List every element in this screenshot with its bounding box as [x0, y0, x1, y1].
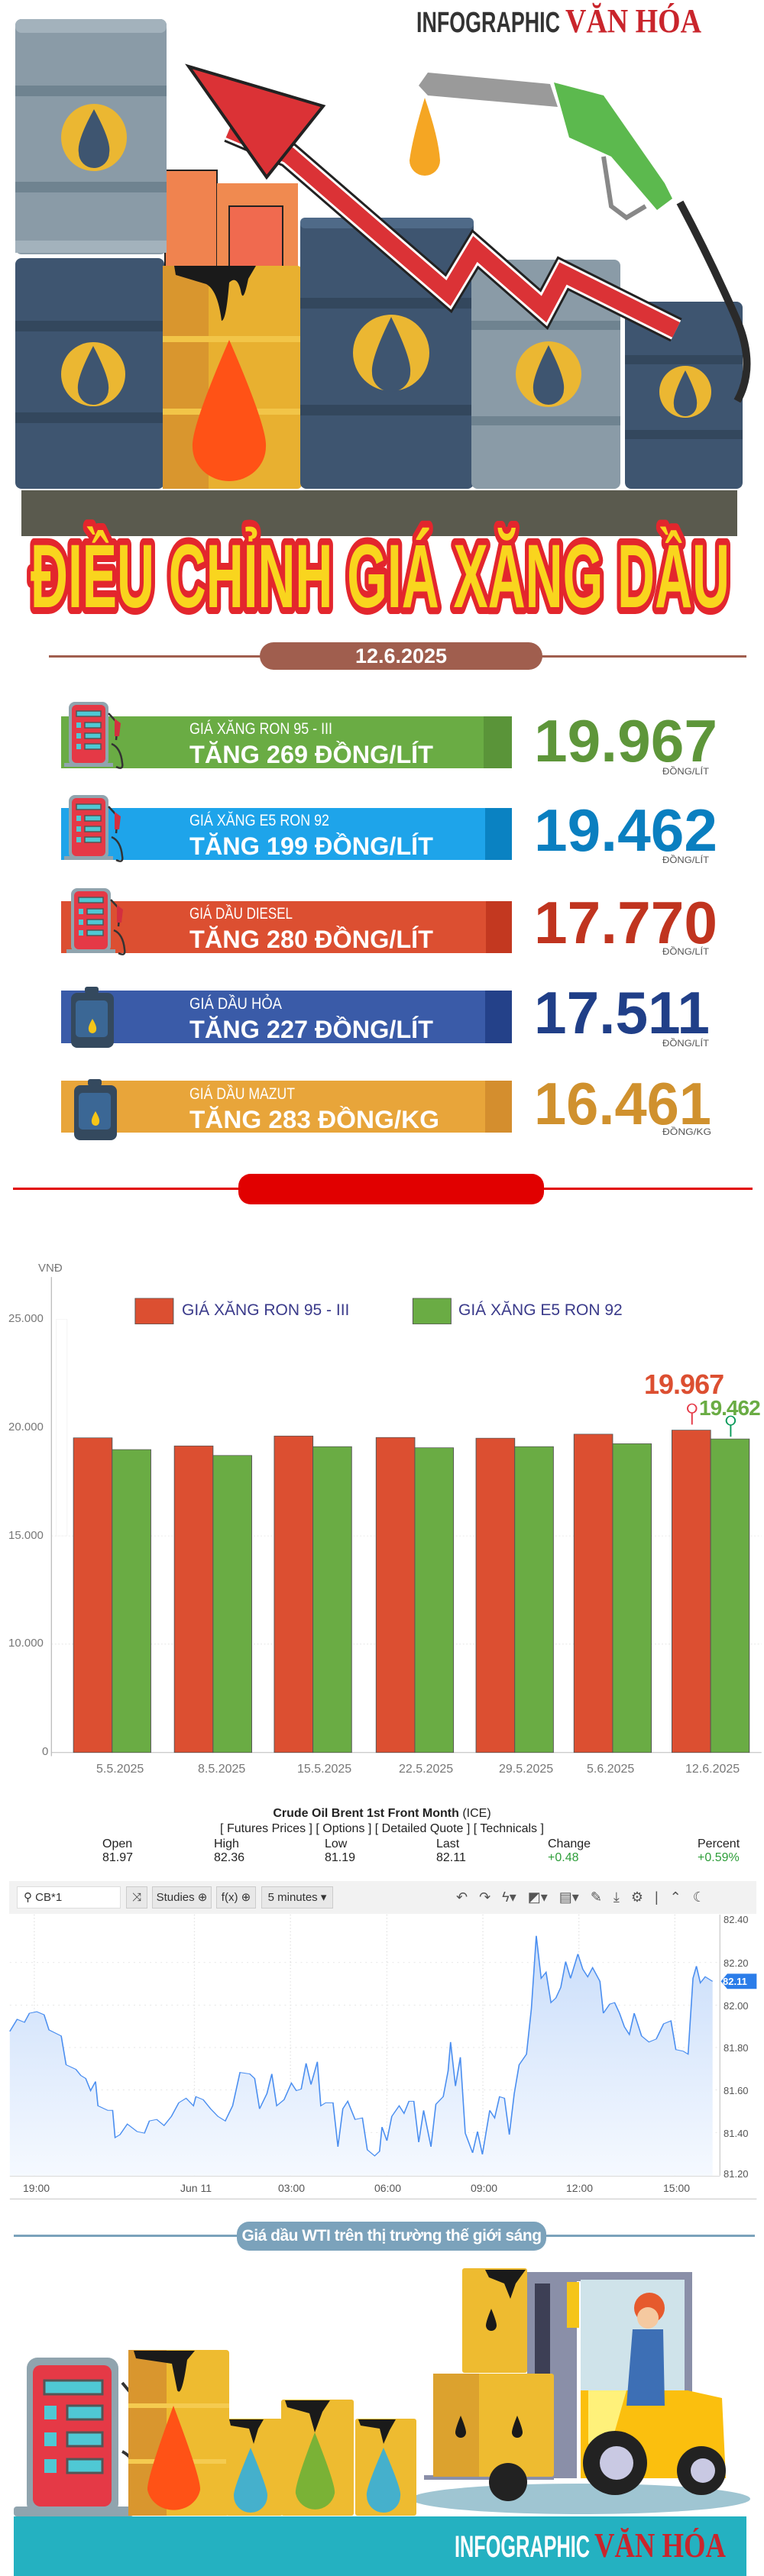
- toolbar: 5 minutes ▾: [268, 1891, 326, 1904]
- y axis labels: 0: [42, 1745, 48, 1758]
- toolbar: f(x) ⊕: [222, 1891, 251, 1904]
- barrel: gray right: [471, 260, 620, 489]
- row: diesel: [61, 888, 717, 957]
- y axis labels: 15.000: [8, 1529, 44, 1542]
- price axis: 81.80: [724, 2042, 749, 2054]
- chart header: Last: [436, 1837, 459, 1850]
- row: diesel: TĂNG 280 ĐỒNG/LÍT: [189, 926, 433, 953]
- price axis: 82.20: [724, 1957, 749, 1969]
- hero illustration: [15, 2, 750, 626]
- logo top: INFOGRAPHIC: [416, 7, 560, 39]
- y axis labels: 25.000: [8, 1312, 44, 1325]
- chart header: +0.48: [548, 1851, 578, 1864]
- y axis labels: 10.000: [8, 1637, 44, 1650]
- chart header: Open: [102, 1837, 132, 1850]
- WTI caption banner: Giá dầu WTI trên thị trường thế giới sáng 12.6: [241, 2227, 542, 2274]
- row: mazut: ĐỒNG/KG: [662, 1126, 711, 1137]
- ground band: [21, 490, 737, 536]
- row: mazut: TĂNG 283 ĐỒNG/KG: [189, 1106, 439, 1133]
- row: diesel: ĐỒNG/LÍT: [662, 945, 710, 957]
- x axis labels: 29.5.2025: [499, 1763, 553, 1776]
- row: E5 RON 92: [61, 795, 717, 865]
- chart header: High: [214, 1837, 239, 1850]
- date banner: 12.6.2025: [355, 645, 447, 667]
- toolbar: ⤨: [132, 1891, 141, 1904]
- date banner: [49, 642, 746, 670]
- time axis: Jun 11: [180, 2182, 212, 2194]
- row: E5 RON 92: ĐỒNG/LÍT: [662, 854, 710, 865]
- row: RON 95: 19.967: [534, 707, 717, 774]
- footer band with logo: [14, 2516, 746, 2576]
- y axis labels: [8, 1262, 63, 1758]
- row: E5 RON 92: 19.462: [534, 797, 717, 864]
- forklift with worker: [424, 2268, 726, 2501]
- chart header: Low: [325, 1837, 347, 1850]
- chart header: 82.11: [436, 1851, 466, 1864]
- logo top: VĂN HÓA: [565, 2, 701, 40]
- bottom illustration: [14, 2268, 750, 2516]
- row: mazut: GIÁ DẦU MAZUT: [189, 1085, 295, 1103]
- x axis labels: 5.6.2025: [587, 1763, 634, 1776]
- chart header: [102, 1807, 740, 1864]
- y axis labels: VNĐ: [38, 1262, 63, 1275]
- row: diesel: GIÁ DẦU DIESEL: [189, 905, 293, 923]
- chart header: Percent: [698, 1837, 740, 1850]
- time axis: 12:00: [566, 2182, 593, 2194]
- chart header: 82.36: [214, 1851, 244, 1864]
- chart header: Change: [548, 1837, 591, 1850]
- row: RON 95: ĐỒNG/LÍT: [662, 765, 710, 777]
- brent oil chart: [9, 1807, 756, 2199]
- icon: fuel pump: [14, 2358, 147, 2516]
- chart header: [ Futures Prices ] [ Options ] [ Detailed Quote ] [ Technicals ]: [220, 1822, 544, 1835]
- value callouts: [644, 1369, 760, 1420]
- value callouts: 19.967: [644, 1369, 724, 1400]
- chart header: 81.97: [102, 1851, 133, 1864]
- price axis: 81.60: [724, 2085, 749, 2096]
- time axis: 06:00: [374, 2182, 401, 2194]
- row: RON 95: [61, 702, 717, 777]
- x axis labels: 5.5.2025: [96, 1763, 144, 1776]
- barrel: yellow with orange drop: [163, 266, 302, 489]
- time axis: 03:00: [278, 2182, 305, 2194]
- forklift shadow: [411, 2484, 750, 2514]
- price axis: [723, 1914, 749, 2180]
- row: E5 RON 92: GIÁ XĂNG E5 RON 92: [189, 812, 329, 829]
- x axis labels: 8.5.2025: [198, 1763, 245, 1776]
- row: kerosene: GIÁ DẦU HỎA: [189, 994, 282, 1013]
- time axis: 09:00: [471, 2182, 497, 2194]
- row: mazut: 16.461: [534, 1070, 711, 1137]
- x axis labels: 12.6.2025: [685, 1763, 740, 1776]
- toolbar: Studies ⊕: [157, 1891, 207, 1904]
- row: mazut: [61, 1070, 711, 1140]
- row: RON 95: GIÁ XĂNG RON 95 - III: [189, 720, 332, 738]
- price axis: 82.11: [723, 1976, 747, 1987]
- row: kerosene: 17.511: [534, 979, 710, 1046]
- WTI caption banner: [14, 2222, 755, 2274]
- row: kerosene: [61, 979, 710, 1049]
- bar chart: [8, 1262, 762, 1776]
- row: kerosene: TĂNG 227 ĐỒNG/LÍT: [189, 1016, 433, 1043]
- price rows: [61, 702, 717, 1140]
- barrels with drops: [128, 2350, 416, 2516]
- row: E5 RON 92: TĂNG 199 ĐỒNG/LÍT: [189, 832, 433, 860]
- value callouts: 19.462: [699, 1396, 760, 1420]
- price axis: 81.40: [724, 2128, 749, 2139]
- x axis labels: [96, 1763, 740, 1776]
- price axis: 82.00: [724, 2000, 749, 2012]
- red rising arrow: [189, 66, 676, 330]
- logo top: [416, 2, 701, 40]
- time axis: 15:00: [663, 2182, 690, 2194]
- orange bars behind barrels: [165, 170, 298, 270]
- y axis labels: 20.000: [8, 1421, 44, 1433]
- price axis: 82.40: [724, 1914, 749, 1925]
- chart header: +0.59%: [698, 1851, 740, 1864]
- row: kerosene: ĐỒNG/LÍT: [662, 1037, 710, 1049]
- x axis labels: 15.5.2025: [297, 1763, 351, 1776]
- row: diesel: 17.770: [534, 889, 717, 956]
- toolbar: [9, 1881, 756, 1914]
- time axis: [23, 2182, 690, 2194]
- legend: [182, 1301, 623, 1319]
- chart header: 81.19: [325, 1851, 355, 1864]
- toolbar: ↶ ↷ ϟ▾ ◩▾ ▤▾ ✎ ⤓ ⚙ | ⌃ ☾: [456, 1889, 705, 1905]
- x axis labels: 22.5.2025: [399, 1763, 453, 1776]
- barrel: navy left: [15, 258, 164, 489]
- barrel: navy middle: [300, 218, 474, 489]
- time axis: 19:00: [23, 2182, 50, 2194]
- legend: GIÁ XĂNG RON 95 - III: [182, 1301, 349, 1319]
- barrel: navy right: [625, 302, 743, 489]
- red divider banner: [13, 1174, 753, 1204]
- toolbar: ⚲ CB*1: [24, 1891, 62, 1904]
- legend: GIÁ XĂNG E5 RON 92: [458, 1301, 623, 1319]
- chart header: Crude Oil Brent 1st Front Month (ICE): [273, 1807, 491, 1820]
- price axis: 81.20: [724, 2168, 749, 2180]
- barrel: gray tall: [15, 19, 167, 254]
- fuel nozzle and hose: [410, 73, 747, 401]
- row: RON 95: TĂNG 269 ĐỒNG/LÍT: [189, 741, 433, 768]
